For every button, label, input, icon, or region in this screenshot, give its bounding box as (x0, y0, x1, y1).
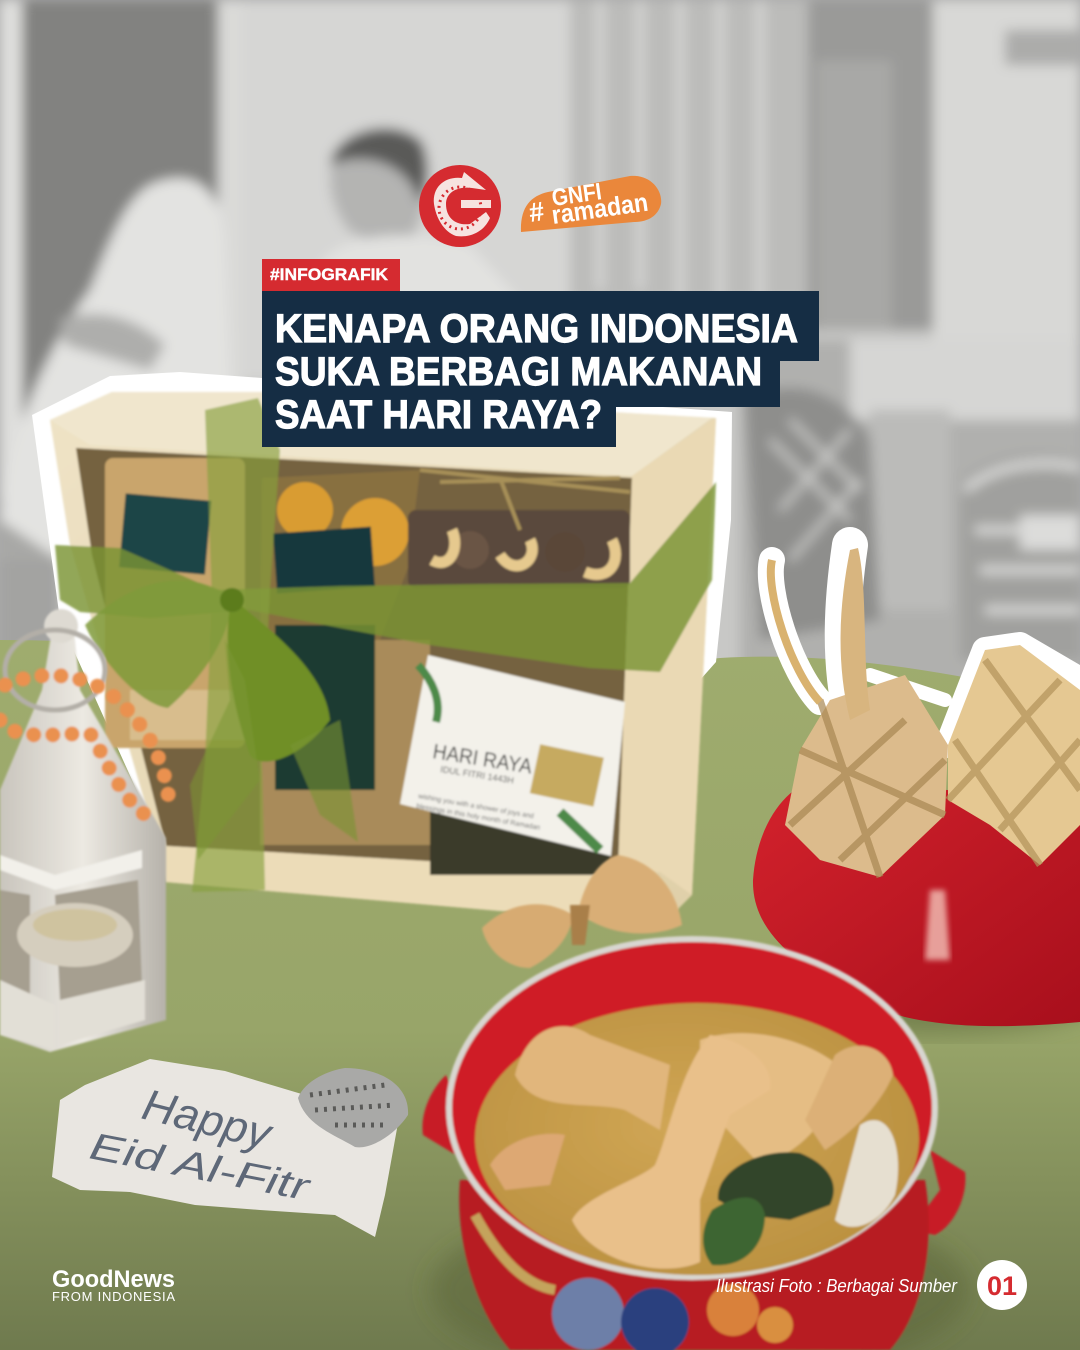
right handle (900, 1150, 965, 1235)
lantern with beads (0, 609, 170, 1052)
greeting card: blessings in this holy month of Ramadan (416, 803, 541, 832)
top rail (50, 392, 712, 476)
handwritten message (86, 1080, 314, 1210)
ribbon horizontal band (55, 482, 716, 672)
tag: #INFOGRAFIK (262, 259, 400, 292)
box outer frame (50, 392, 716, 925)
ribbon bow (85, 580, 232, 708)
shadow (750, 945, 1080, 1035)
handwritten message: Eid Al-Fitr (86, 1126, 314, 1210)
red pot with chicken curry (422, 936, 970, 1350)
ribbon vertical (192, 398, 280, 892)
ketupat right (948, 645, 1080, 865)
curry (475, 1003, 919, 1275)
tag: GNFI ramadan: ramadan (550, 187, 650, 230)
cookie tray centre (260, 470, 420, 640)
bottom rail (165, 846, 662, 925)
ketupat and red plate (750, 545, 1080, 1035)
gift box (50, 392, 716, 925)
white cutout edge of ketupat (771, 545, 1080, 745)
title (262, 291, 819, 447)
tag: #INFOGRAFIK: #INFOGRAFIK (270, 265, 389, 284)
metal heart (298, 1068, 408, 1147)
greeting card (400, 655, 625, 856)
tag: GNFI ramadan: GNFI (550, 178, 603, 212)
greeting card: HARI RAYA (431, 740, 534, 779)
tag: GNFI ramadan: # (527, 196, 546, 228)
red plate (753, 780, 1080, 1026)
lime leaves (718, 1152, 834, 1220)
tag: GNFI ramadan (521, 176, 661, 232)
right rail (618, 418, 716, 895)
ketupat left (785, 675, 948, 877)
title: KENAPA ORANG INDONESIA (275, 307, 798, 351)
cookie tray left (105, 458, 245, 748)
torn paper note (52, 1059, 408, 1237)
greeting card: wishing you with a shower of joys and (417, 793, 534, 820)
box inner (76, 448, 632, 872)
left handle (422, 1075, 456, 1155)
logo: GNFI emblem (419, 165, 501, 247)
lantern body (0, 630, 166, 1052)
page number: 01 (987, 1271, 1017, 1301)
greeting card: IDUL FITRI 1443H (440, 764, 515, 786)
logo: GoodNews from Indonesia: GoodNews (52, 1266, 175, 1293)
straw (420, 470, 630, 530)
title: SUKA BERBAGI MAKANAN (275, 350, 762, 394)
logo: GoodNews from Indonesia: FROM INDONESIA (52, 1289, 175, 1304)
page number (977, 1260, 1027, 1310)
lantern window (0, 880, 142, 1000)
chocolate cashew tray (408, 510, 630, 588)
rim (446, 936, 938, 1280)
handwritten message: Happy (138, 1080, 279, 1160)
pot shadow (430, 1200, 970, 1350)
white cutout outline around gift box (32, 372, 732, 820)
floral band (475, 1215, 793, 1350)
background: archival black and white photo (0, 0, 1080, 710)
gold satin bow (482, 855, 682, 968)
chicken pieces (515, 1026, 670, 1130)
photo credit: Ilustrasi Foto : Berbagai Sumber (716, 1276, 958, 1296)
title: SAAT HARI RAYA? (275, 393, 602, 437)
orange beads (0, 675, 170, 820)
pot body (459, 1180, 929, 1350)
green table surface (0, 640, 1080, 1350)
lower goods (260, 640, 430, 845)
title background (262, 291, 819, 447)
